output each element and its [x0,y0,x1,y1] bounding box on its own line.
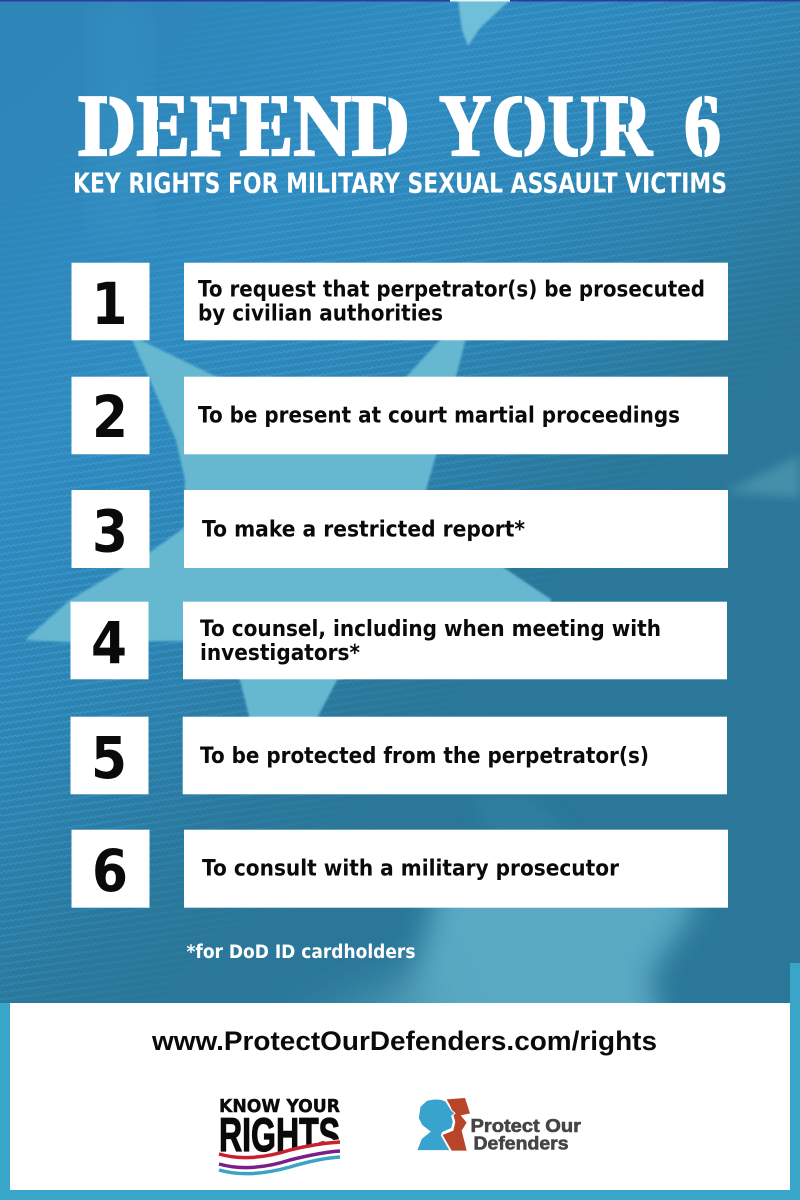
logo: know your rights: RIGHTS [219,1108,340,1161]
text box 6: To consult with a military prosecutor [202,856,620,882]
icon: red silhouette [443,1098,470,1151]
logo: know your rights [218,1096,341,1178]
panel: right 6 [72,830,728,908]
website url: www.ProtectOurDefenders.com/rights [151,1026,657,1056]
number box 6: 6 [92,837,128,905]
title: DEFEND [78,78,410,175]
text box 5 [183,717,727,794]
text box 4 [183,602,727,679]
title: YOUR [439,78,653,175]
text box 5: To be protected from the perpetrator(s) [200,743,649,769]
text box 2 [184,377,728,454]
number box 1 [72,263,150,340]
panel: right 2 [72,377,728,454]
text box 3: To make a restricted report* [202,517,525,543]
number box 4: 4 [91,609,127,677]
panel: footer [10,1003,790,1190]
number box 3 [72,490,150,568]
number box 1: 1 [92,270,128,338]
logo: know your rights: KNOW YOUR [219,1096,340,1117]
number box 6 [72,830,150,908]
text box 2: To be present at court martial proceedings [198,403,680,429]
logo: protect our defenders [417,1098,581,1154]
number box 3: 3 [92,498,128,566]
logo wordmark: Defenders [474,1132,568,1154]
icon: blue silhouette [417,1099,455,1151]
text box 6 [184,830,728,908]
title [78,78,721,175]
text box 4: To counsel, including when meeting with [200,616,661,642]
text box 4: investigators* [200,640,360,666]
footer frame [0,963,800,1200]
title: 6 [684,78,721,175]
number box 5: 5 [91,724,127,792]
panel: right 1 [72,263,728,340]
footnote: *for DoD ID cardholders [186,942,416,963]
text box 3 [184,490,728,568]
text box 1: by civilian authorities [198,301,443,327]
text box 1 [184,263,728,340]
panel: right 5 [70,717,727,794]
number box 2: 2 [92,383,128,451]
panel: right 4 [70,602,727,679]
number box 4 [70,602,148,679]
logo wordmark [470,1115,581,1154]
logo wordmark: Protect Our [470,1115,581,1136]
number box 5 [70,717,148,794]
number box 2 [72,377,150,454]
panel: right 3 [72,490,728,568]
text box 1: To request that perpetrator(s) be prosecuted [198,277,705,303]
